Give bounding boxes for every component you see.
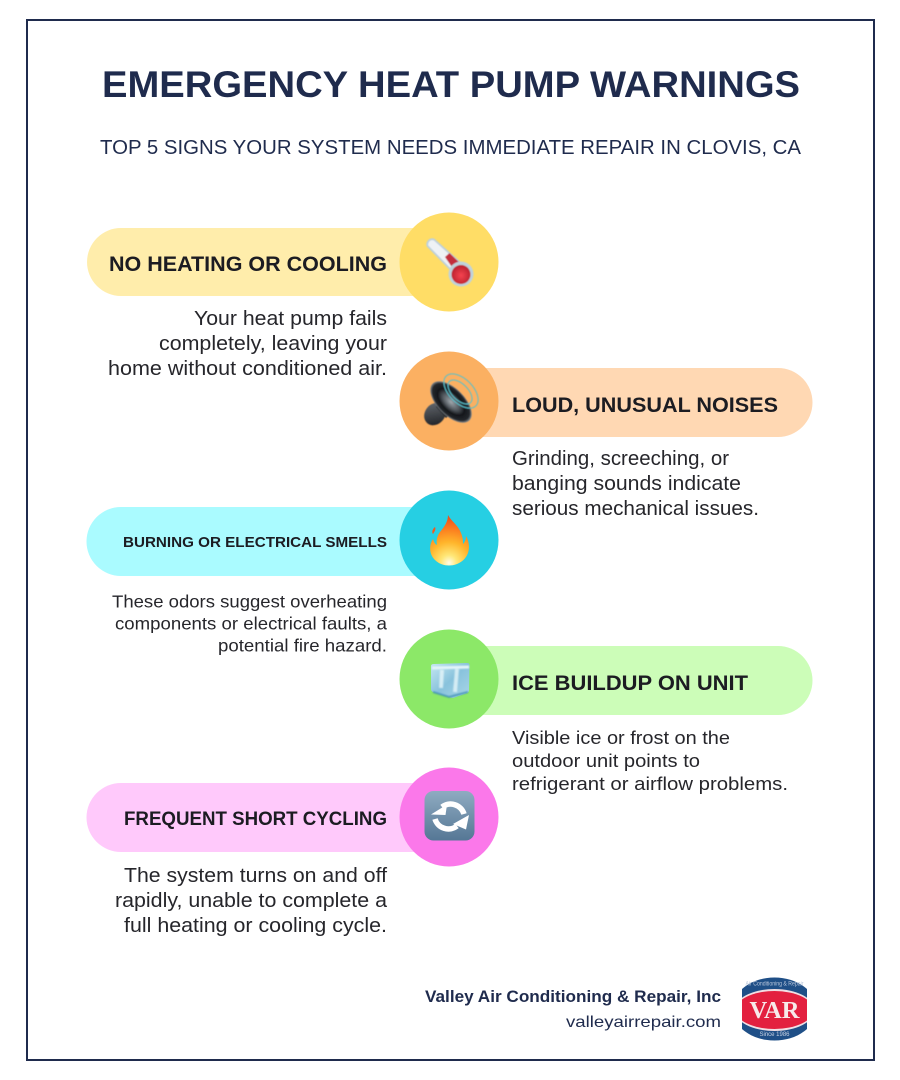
icon: speaker <box>420 368 484 430</box>
description <box>115 865 388 937</box>
description: serious mechanical issues. <box>512 498 759 520</box>
description: completely, leaving your <box>159 333 387 355</box>
heading: NO HEATING OR COOLING <box>109 253 387 276</box>
logo: Air Conditioning & Repair <box>746 982 804 988</box>
description <box>512 448 759 520</box>
title: EMERGENCY HEAT PUMP WARNINGS <box>102 64 800 105</box>
description: rapidly, unable to complete a <box>115 890 388 912</box>
description: Your heat pump fails <box>194 308 387 330</box>
description: The system turns on and off <box>124 865 387 887</box>
heading pill <box>87 228 460 296</box>
icon: cycle arrows <box>424 791 474 840</box>
description: Grinding, screeching, or <box>512 448 729 470</box>
logo: VAR <box>750 998 800 1024</box>
panel: no heating or cooling <box>87 212 499 380</box>
icon circle <box>400 768 498 866</box>
footer company name: Valley Air Conditioning & Repair, Inc <box>425 988 721 1006</box>
heading pill <box>87 783 460 852</box>
heading: BURNING OR ELECTRICAL SMELLS <box>123 534 387 551</box>
panel: ice buildup on unit <box>400 630 813 794</box>
description: potential fire hazard. <box>218 636 387 656</box>
description: banging sounds indicate <box>512 473 741 495</box>
description: Visible ice or frost on the <box>512 728 730 748</box>
description: These odors suggest overheating <box>112 592 387 612</box>
description <box>112 592 387 656</box>
description <box>512 728 788 794</box>
panel: loud, unusual noises <box>400 352 813 520</box>
icon circle <box>400 630 498 728</box>
heading pill <box>87 507 460 576</box>
subtitle: TOP 5 SIGNS YOUR SYSTEM NEEDS IMMEDIATE REPAIR IN CLOVIS, CA <box>100 137 802 159</box>
icon: ice cube <box>431 663 470 698</box>
description: outdoor unit points to <box>512 751 700 771</box>
description: components or electrical faults, a <box>115 614 387 634</box>
description: home without conditioned air. <box>108 358 387 380</box>
heading pill <box>440 368 813 437</box>
icon circle <box>400 212 498 312</box>
logo <box>742 978 807 1040</box>
description: refrigerant or airflow problems. <box>512 774 788 794</box>
panel: frequent short cycling <box>87 768 499 937</box>
icon circle <box>400 490 498 590</box>
panel: burning or electrical smells <box>87 490 499 656</box>
footer website: valleyairrepair.com <box>566 1014 721 1031</box>
icon: flame <box>430 515 469 566</box>
description <box>108 308 387 380</box>
icon circle <box>400 352 498 450</box>
heading: FREQUENT SHORT CYCLING <box>124 808 387 830</box>
heading: ICE BUILDUP ON UNIT <box>512 672 748 695</box>
icon: thermometer <box>427 239 474 286</box>
heading: LOUD, UNUSUAL NOISES <box>512 394 778 417</box>
heading pill <box>440 646 813 715</box>
logo: Since 1986 <box>759 1032 790 1038</box>
description: full heating or cooling cycle. <box>124 915 387 937</box>
